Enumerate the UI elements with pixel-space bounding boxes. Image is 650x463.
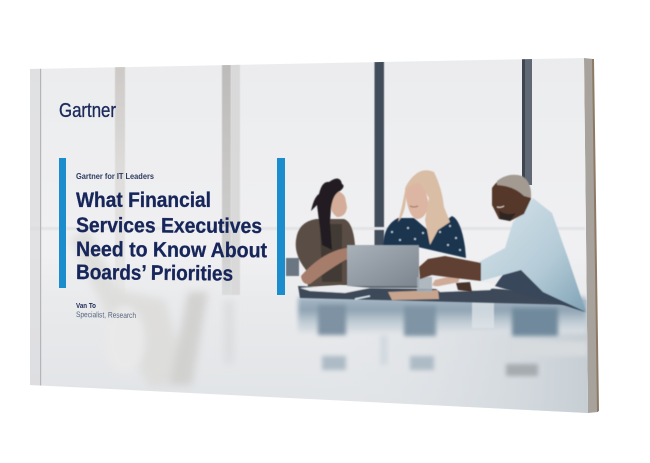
accent bar right xyxy=(277,158,285,295)
person: woman on left xyxy=(286,178,357,287)
title: Boards’ Priorities xyxy=(76,261,233,286)
accent bar left xyxy=(59,158,66,288)
laptop xyxy=(347,245,419,288)
table surface reflections xyxy=(298,297,587,376)
book spine xyxy=(584,58,599,413)
eyebrow: Gartner for IT Leaders xyxy=(76,171,154,181)
window columns xyxy=(115,55,532,300)
author: Van To xyxy=(76,301,96,310)
author: Specialist, Research xyxy=(76,310,136,320)
person: woman in middle xyxy=(383,170,466,293)
author xyxy=(76,301,136,320)
title: What Financial xyxy=(76,189,211,212)
blurred chair xyxy=(70,228,234,388)
report cover mockup xyxy=(30,58,599,413)
Gartner logo: Gartner xyxy=(59,99,116,122)
left crease strip xyxy=(30,60,40,390)
window sill line xyxy=(30,227,585,230)
person: man on right xyxy=(419,175,586,312)
cover photo: meeting room xyxy=(30,50,590,420)
table dark edge xyxy=(298,277,575,305)
title xyxy=(76,189,267,286)
title: Need to Know About xyxy=(76,238,267,262)
title: Services Executives xyxy=(76,214,262,238)
